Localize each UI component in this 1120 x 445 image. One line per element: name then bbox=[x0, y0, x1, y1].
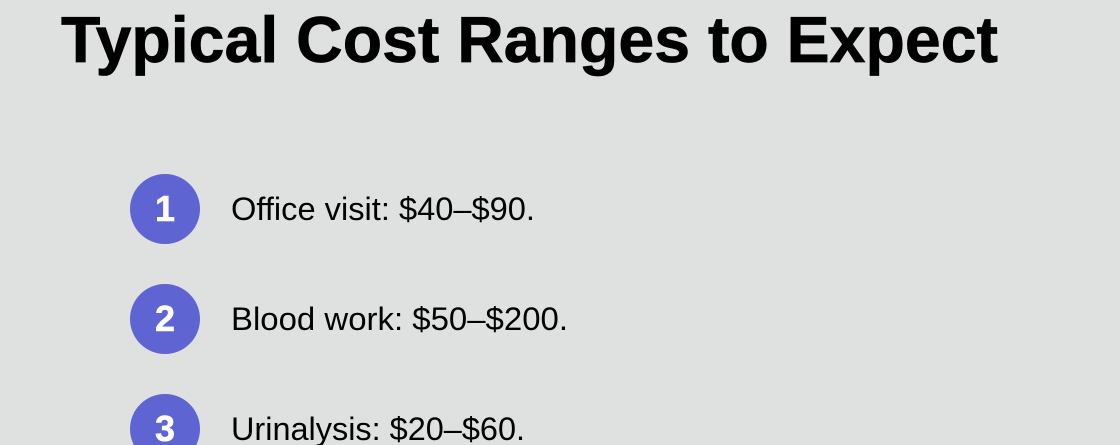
item text 1: Office visit: $40–$90. bbox=[231, 191, 535, 227]
list item 2: blood work bbox=[130, 284, 568, 354]
number badge 1: 1 bbox=[155, 188, 175, 229]
number badge 2: 2 bbox=[155, 298, 175, 339]
number badge 3 bbox=[130, 394, 200, 445]
number badge 1 bbox=[130, 174, 200, 244]
item text 2: Blood work: $50–$200. bbox=[231, 301, 568, 337]
title: Typical Cost Ranges to Expect bbox=[61, 3, 998, 76]
list item 3: urinalysis bbox=[130, 394, 525, 445]
list item 1: office visit bbox=[130, 174, 535, 244]
number badge 2 bbox=[130, 284, 200, 354]
